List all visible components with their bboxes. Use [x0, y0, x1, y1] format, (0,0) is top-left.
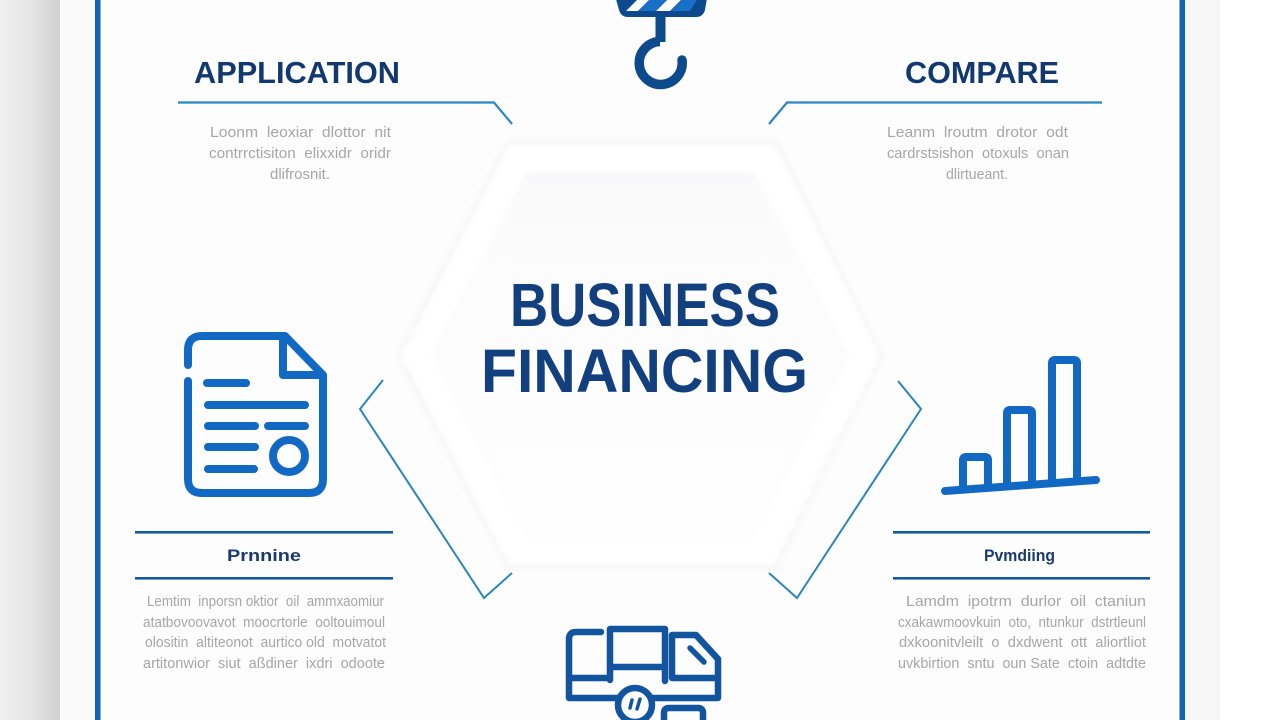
text block: application: contrrctisiton elixxidr oridr [209, 145, 391, 162]
heading: compare: COMPARE [905, 55, 1059, 90]
text block: left detail [143, 594, 386, 672]
label: left subheading: Prnnine [227, 546, 301, 565]
arrow: left chevron [360, 380, 512, 598]
text block: application: dlifrosnit. [270, 166, 330, 183]
icon: bar chart [945, 360, 1096, 491]
text block: right detail: Lamdm ipotrm durlor oil ctaniun [906, 594, 1146, 610]
text block: right detail: uvkbirtion sntu oun Sate ctoin adtdte [898, 656, 1146, 672]
panel: application [178, 55, 512, 183]
text block: right detail: dxkoonitvleilt o dxdwent ott aliortliot [899, 635, 1146, 651]
connector line: application [178, 102, 512, 124]
text block: right detail [898, 594, 1146, 672]
title: business financing: FINANCING [481, 337, 808, 405]
text block: right detail: cxakawmoovkuin oto, ntunkur dstrtleunl [898, 615, 1146, 631]
panel: left detail [135, 531, 393, 672]
text block: compare: dlirtueant. [946, 166, 1008, 183]
icon: document [188, 336, 323, 493]
arrow: right chevron [769, 381, 921, 598]
text block: application [209, 124, 392, 183]
label: right subheading: Pvmdiing [984, 546, 1055, 565]
heading: application: APPLICATION [194, 55, 400, 90]
text block: compare: Leanm lroutm drotor odt [887, 124, 1069, 141]
divider rules: left label [135, 531, 393, 580]
central hexagon [398, 142, 882, 567]
text block: application: Loonm leoxiar dlottor nit [210, 124, 392, 141]
connector line: compare [769, 102, 1102, 124]
text block: compare: cardrstsishon otoxuls onan [887, 145, 1069, 162]
icon: truck [569, 629, 718, 720]
title: business financing [481, 271, 808, 405]
title: business financing: BUSINESS [510, 271, 780, 339]
icon: crane hook [614, 0, 708, 84]
panel: compare [769, 55, 1102, 183]
panel: right detail [893, 531, 1150, 672]
divider rules: right label [893, 531, 1150, 580]
text block: left detail: olositin altiteonot aurtico old motvatot [145, 635, 386, 651]
text block: left detail: atatbovoovavot moocrtorle ooltouimoul [143, 615, 385, 631]
text block: compare [887, 124, 1069, 183]
text block: left detail: Lemtim inporsn oktior oil ammxaomiur [147, 594, 384, 610]
text block: left detail: artitonwior siut aßdiner ixdri odoote [143, 656, 385, 672]
